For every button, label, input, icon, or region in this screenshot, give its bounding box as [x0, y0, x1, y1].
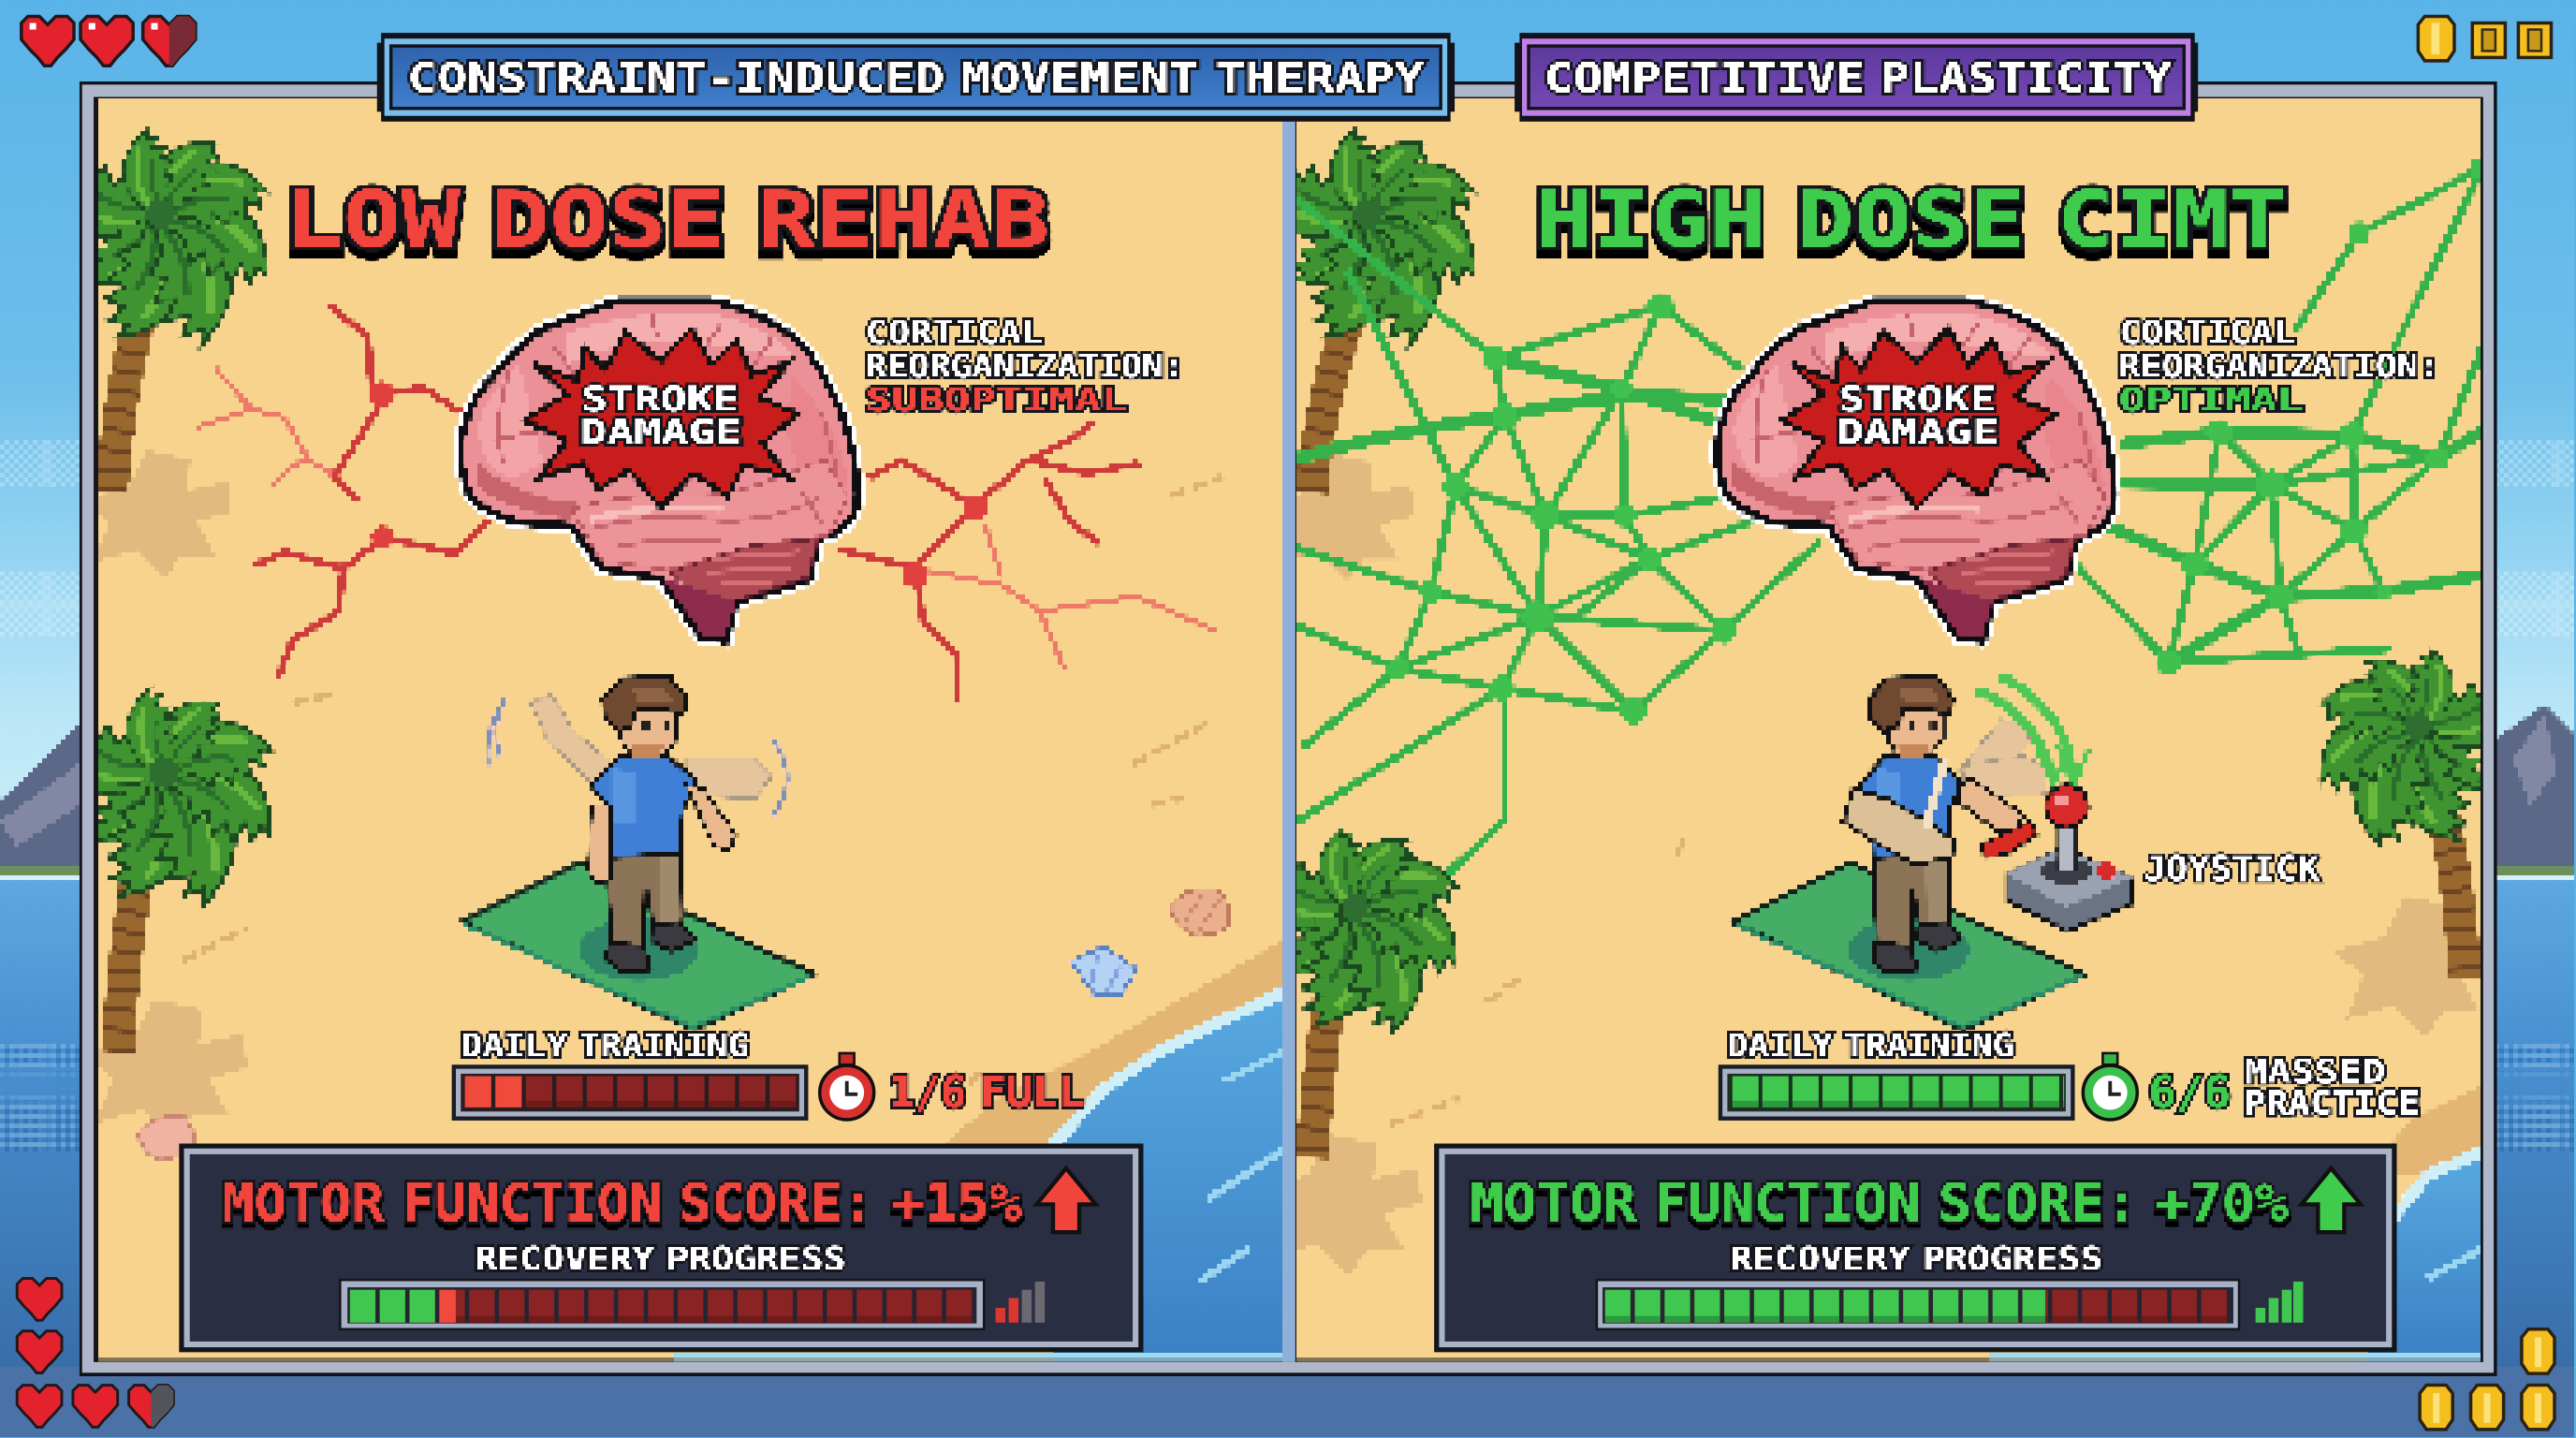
daily training bar: high dose [1719, 1064, 2075, 1121]
panel art: beach scene [43, 100, 1283, 1360]
red mitt [1982, 822, 2037, 858]
label: stroke damage: STROKE [581, 379, 739, 419]
label: cortical reorganization suboptimal: CORTICAL [866, 314, 1043, 352]
label: joystick: JOYSTICK [2144, 849, 2320, 889]
ghost arms [1958, 720, 2047, 799]
label: one sixth full: 1/6 FULL [888, 1067, 1084, 1119]
panel: low dose rehab [43, 100, 1283, 1360]
label: daily training: DAILY TRAINING [461, 1026, 749, 1064]
label: motor function score +15%: MOTOR FUNCTION SCORE: +15% [222, 1173, 1022, 1234]
coins: top right [2418, 17, 2552, 61]
palm tree upper left [1251, 125, 1494, 581]
label: stroke damage: DAMAGE [1837, 412, 1999, 452]
banner: competitive plasticity: COMPETITIVE PLASTICITY [1544, 54, 2173, 102]
score panel: high dose [1434, 1143, 2397, 1352]
banner: constraint-induced movement therapy [377, 33, 1455, 122]
panel text: high dose [1471, 173, 2439, 1279]
icon: signal bars high [2256, 1282, 2304, 1323]
label: massed practice: PRACTICE [2244, 1084, 2420, 1123]
sand [1295, 100, 2482, 1360]
label: stroke damage [580, 379, 742, 452]
wet sand [2365, 1084, 2482, 1183]
label: cortical reorganization suboptimal: SUBOPTIMAL [866, 381, 1127, 419]
palm crown lower left, over network [1243, 823, 1474, 1040]
label: cortical reorganization optimal: OPTIMAL [2119, 381, 2304, 419]
ghost arms [531, 694, 772, 799]
label: motor function score +70%: MOTOR FUNCTION SCORE: +70% [1471, 1173, 2289, 1234]
label: massed practice [2244, 1053, 2420, 1123]
motion arcs [487, 698, 787, 816]
ocean [674, 992, 1283, 1360]
panel: high dose cimt [1243, 100, 2526, 1360]
shells [138, 889, 1229, 1160]
icon: brain with stroke damage [461, 301, 857, 640]
sand marks [1388, 835, 2144, 1183]
panel text: low dose [222, 173, 1184, 1279]
reaching arm [1958, 779, 2024, 831]
sling [1843, 788, 1954, 864]
panel art: beach scene with dense network [1243, 100, 2526, 1360]
label: cortical reorganization optimal: REORGANIZATION: [2119, 347, 2439, 386]
coins: bottom right [2420, 1329, 2554, 1430]
mountains right [2494, 705, 2576, 875]
motion arrows [1976, 675, 2073, 781]
daily training bar: low dose [452, 1064, 808, 1121]
label: stroke damage [1837, 379, 1999, 452]
sand [95, 100, 1283, 1360]
mat and patient with sling [1732, 675, 2089, 1030]
hearts: bottom left lives [17, 1279, 173, 1427]
palm tree upper [98, 126, 271, 576]
label: cortical reorganization suboptimal [866, 314, 1184, 419]
score panel: low dose [179, 1143, 1143, 1352]
ocean [1988, 1152, 2482, 1360]
recovery bar: high dose [1597, 1280, 2239, 1329]
banner: competitive plasticity [1515, 33, 2198, 122]
palm crown right, over network [2303, 644, 2526, 856]
label: recovery progress: RECOVERY PROGRESS [1730, 1240, 2102, 1279]
label: recovery progress: RECOVERY PROGRESS [475, 1240, 846, 1279]
icon: joystick [2008, 785, 2132, 932]
sand marks [181, 477, 1223, 1084]
label: cortical reorganization optimal: CORTICAL [2119, 314, 2295, 352]
wet sand [945, 941, 1282, 1144]
damaged neural cracks [198, 304, 1216, 701]
icon: stopwatch red [820, 1053, 874, 1120]
title: low dose rehab: LOW DOSE REHAB [285, 173, 1049, 265]
icon: stopwatch green [2083, 1053, 2137, 1120]
palm tree right trunk [2332, 772, 2497, 1037]
label: cortical reorganization suboptimal: REORGANIZATION: [866, 347, 1184, 386]
label: massed practice: MASSED [2244, 1053, 2385, 1092]
sky dither patches [0, 440, 2576, 636]
label: cortical reorganization optimal [2119, 314, 2439, 419]
label: stroke damage: STROKE [1838, 379, 1996, 419]
palm tree lower [47, 683, 290, 1140]
label: stroke damage: DAMAGE [580, 412, 742, 452]
title: high dose cimt: HIGH DOSE CIMT [1536, 173, 2287, 265]
sea [0, 875, 2576, 1377]
recovery bar: low dose [340, 1280, 984, 1329]
icon: red up arrow [1036, 1168, 1096, 1232]
mat and patient moving freely [461, 677, 814, 1030]
palm tree lower left [1256, 969, 1422, 1275]
banner: constraint-induced movement therapy: CONSTRAINT-INDUCED MOVEMENT THERAPY [407, 54, 1425, 102]
mountains left [0, 725, 82, 875]
icon: green up arrow [2302, 1168, 2361, 1232]
healthy neural network left [1297, 200, 1819, 874]
icon: brain with stroke damage [1718, 301, 2115, 640]
label: six sixths: 6/6 [2149, 1067, 2231, 1119]
arms [588, 805, 611, 884]
icon: signal bars low [996, 1282, 1045, 1323]
healthy neural network right [2075, 157, 2489, 675]
label: daily training: DAILY TRAINING [1727, 1026, 2014, 1064]
hearts: top left lives [22, 17, 196, 66]
